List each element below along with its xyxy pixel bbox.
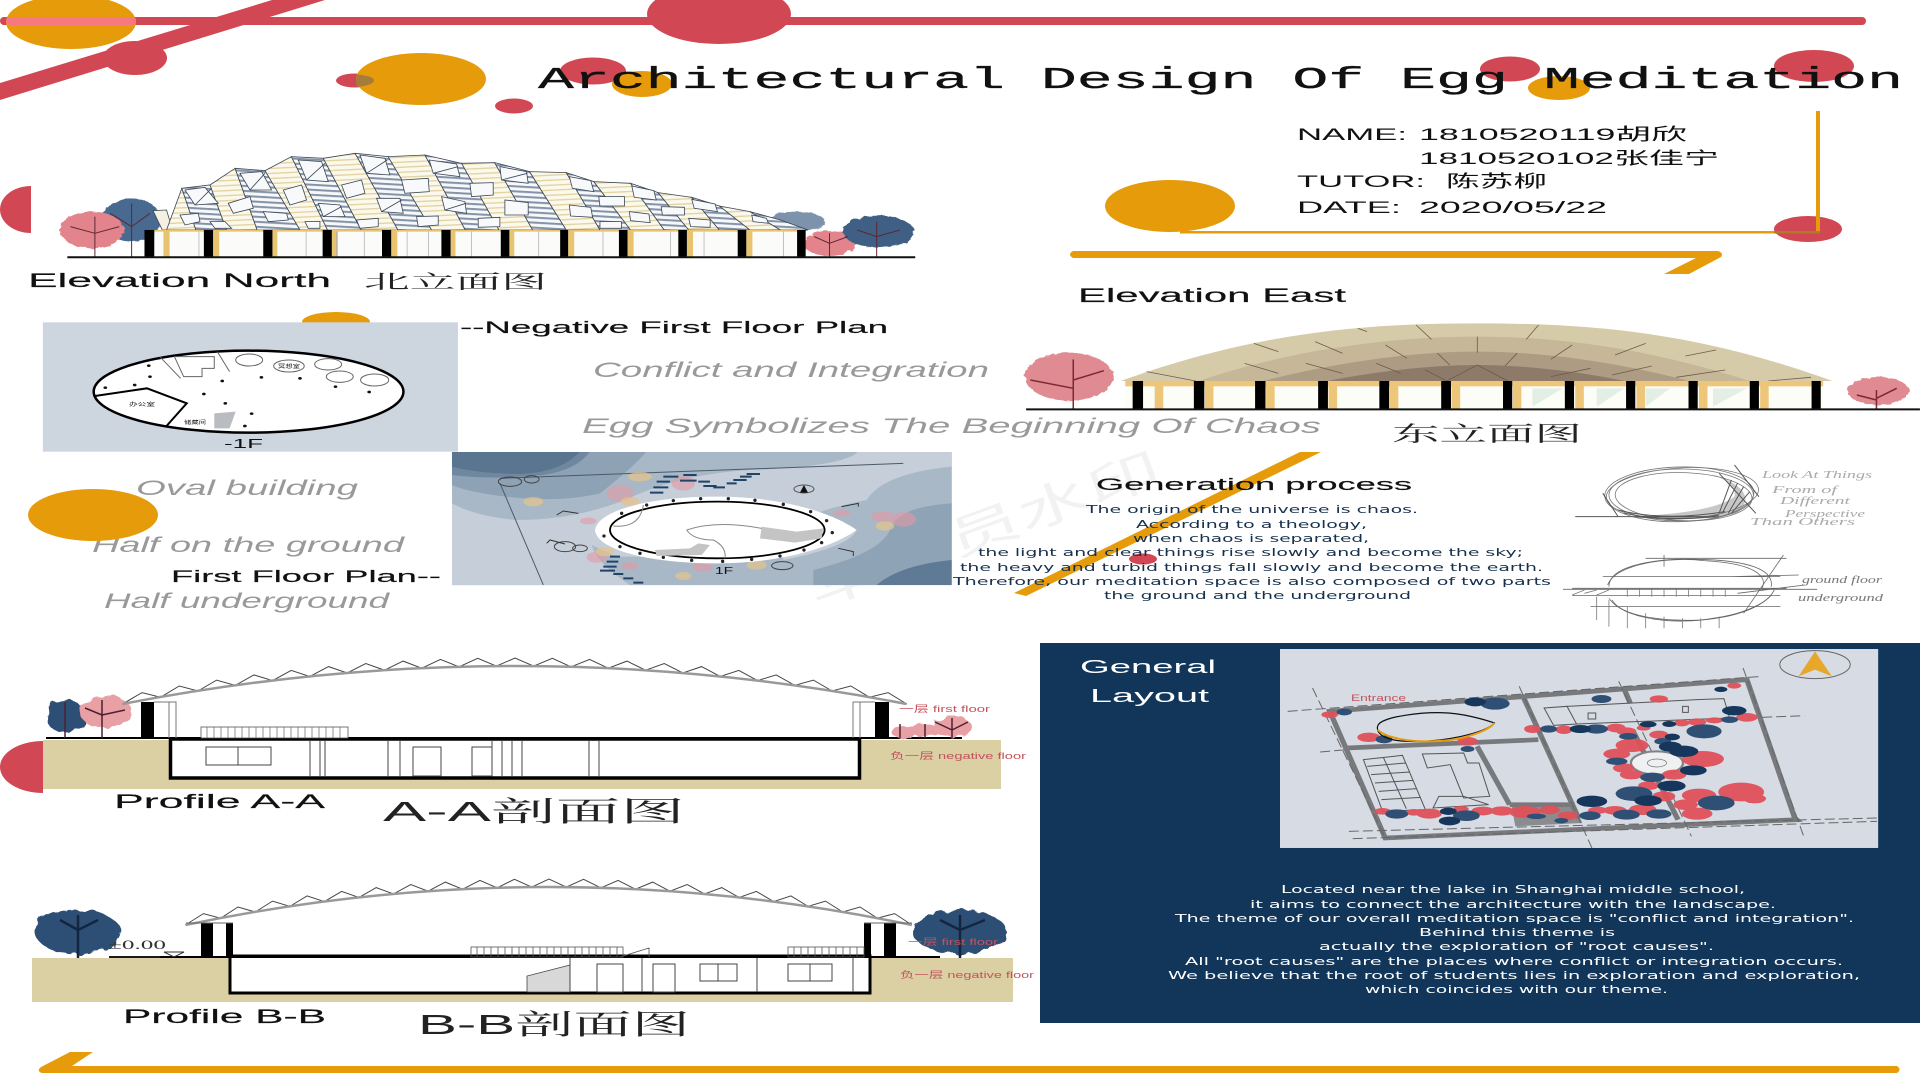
text block: generation: when chaos is separated, (1133, 532, 1369, 545)
roof B (185, 879, 912, 925)
level mark (109, 952, 184, 957)
text block: generation: the ground and the underground (1104, 589, 1411, 602)
section marks (547, 503, 858, 556)
top red bar (0, 17, 1866, 25)
label: profile A-A (114, 792, 685, 827)
info block: names, tutor, date: TUTOR: (1297, 172, 1425, 191)
red half circle left (0, 186, 31, 233)
plan labels: 冥想室 (278, 363, 300, 370)
pillars B (201, 923, 896, 957)
sketch: handwritten notes 1: Perspective (1783, 509, 1866, 520)
label: profile A-A: Profile A-A (114, 792, 326, 813)
plan labels: 储藏间 (184, 419, 206, 426)
roof A (123, 658, 907, 704)
red diagonal band (0, 0, 325, 100)
gold ellipse (1105, 180, 1235, 232)
section B-B labels: ±0.00 (108, 937, 166, 952)
trees B (35, 910, 1007, 954)
script text phrases: Oval building (136, 477, 359, 500)
label: profile B-B (123, 1007, 690, 1040)
panel: general layout (1040, 643, 1920, 1023)
trees (1321, 683, 1766, 820)
label: elevation east: Elevation East (1078, 286, 1348, 307)
info block: names, tutor, date: DATE: (1297, 198, 1401, 217)
label: elevation north: 北立面图 (364, 271, 547, 293)
north arrow (1780, 651, 1850, 679)
stairs B (527, 965, 570, 992)
script text phrases: Conflict and Integration (593, 359, 989, 382)
panel: general layout: Layout (1090, 686, 1209, 706)
decoration: gold frame and arrow around info (1070, 111, 1842, 274)
plan labels: 办公室 (129, 401, 155, 408)
label: east in chinese: 东立面图 (1392, 423, 1582, 446)
elevation north drawing (60, 153, 915, 257)
sketch: egg in ground section (1563, 555, 1817, 628)
ground floor band (154, 230, 803, 257)
red ellipse at frame corner (1774, 216, 1842, 242)
info block: names, tutor, date: 1810520119胡欣 (1419, 125, 1687, 144)
big red ellipse top (647, 0, 791, 44)
small header ellipses (336, 74, 374, 88)
text block: generation: the heavy and turbid things fall slowly and become the earth. (960, 561, 1543, 574)
elevation east drawing (1025, 323, 1920, 409)
rooms A (206, 740, 599, 776)
site map (1280, 649, 1878, 848)
section A-A floor labels (890, 704, 1026, 761)
text block: generation: The origin of the universe is chaos. (1084, 503, 1418, 516)
text block: site description: We believe that the root of students lies in exploration and exploration, (1168, 969, 1860, 982)
trees A (45, 696, 972, 738)
text block: generation (951, 503, 1551, 602)
script text phrases (92, 359, 1322, 613)
roof facets (153, 153, 808, 230)
script text phrases: Half underground (104, 590, 391, 613)
rooms B (570, 958, 853, 992)
script text phrases: Egg Symbolizes The Beginning Of Chaos (582, 415, 1322, 438)
gold arrow (1070, 251, 1722, 274)
sketch: handwritten notes 1 (1750, 470, 1872, 528)
section A-A drawing (0, 658, 1001, 793)
plants (580, 476, 916, 572)
sketch: handwritten notes 1: Look At Things (1760, 470, 1872, 481)
script text phrases: Half on the ground (92, 534, 406, 557)
first floor plan map (452, 452, 952, 585)
red dot near text (1129, 554, 1157, 564)
sketch: handwritten notes 1: Than Others (1750, 517, 1855, 528)
surrounding buildings (1363, 699, 1730, 811)
outer dashed lines (1288, 668, 1877, 848)
text block: generation: the light and clear things rise slowly and become the sky; (978, 546, 1523, 559)
ground floor band (1125, 381, 1823, 409)
text block: site description (1168, 883, 1860, 996)
sketch: handwritten notes 1: From of (1770, 485, 1839, 496)
info block: names, tutor, date: 2020/05/22 (1419, 198, 1607, 217)
1F label: 1F (715, 566, 733, 577)
info block: names, tutor, date (1297, 125, 1719, 217)
compass (794, 485, 814, 493)
gold half ellipse behind plan (302, 312, 370, 332)
info block: names, tutor, date: 1810520102张佳宁 (1419, 149, 1719, 168)
text block: site description: actually the exploration of "root causes". (1319, 940, 1714, 953)
railings B (471, 947, 864, 957)
room circles (236, 354, 389, 386)
dome rings (1120, 323, 1832, 381)
office walls (95, 388, 187, 426)
stepping stones (600, 474, 760, 583)
label: profile B-B: B-B剖面图 (418, 1009, 690, 1040)
section B-B labels (108, 937, 1034, 980)
egg plan white ring (595, 497, 857, 563)
section B-B labels: 负一层 negative floor (900, 969, 1034, 980)
section B-B drawing (32, 879, 1013, 1002)
trees behind (60, 198, 914, 256)
sketch: egg concept (1575, 462, 1765, 524)
gold ellipse top left (6, 0, 136, 49)
sketch: handwritten notes 2: ground floor (1802, 575, 1882, 586)
earth (32, 958, 1013, 1002)
plan labels (129, 318, 888, 586)
roads (1330, 680, 1797, 838)
plan labels: First Floor Plan-- (171, 567, 441, 586)
central plaza (1631, 751, 1683, 775)
red half circle (0, 741, 43, 793)
sketch: handwritten notes 1: Different (1778, 496, 1850, 507)
title: Architectural Design Of Egg Meditation (538, 63, 1903, 98)
railing A (201, 727, 348, 738)
section B-B labels: 一层 first floor (908, 937, 998, 947)
column dots ring (602, 497, 834, 563)
column dots (103, 364, 371, 427)
earth (43, 740, 1001, 789)
gold diagonal line (1014, 452, 1321, 596)
sketch: handwritten notes 2: underground (1798, 593, 1885, 604)
interior (170, 739, 860, 778)
label: elevation north: Elevation North (28, 271, 331, 292)
info block: names, tutor, date: 陈苏柳 (1446, 172, 1547, 191)
text block: site description: All "root causes" are the places where conflict or integration occurs. (1185, 955, 1843, 968)
plan labels: -1F (224, 436, 263, 451)
heading: generation process: Generation process (1096, 475, 1412, 494)
label: profile A-A: A-A剖面图 (383, 796, 685, 827)
oval outline (94, 351, 403, 433)
pink trees (1025, 353, 1909, 405)
text block: generation: Therefore, our meditation space is also composed of two parts (951, 575, 1551, 588)
watermark: 华会员水印 (802, 442, 1167, 618)
text block: site description: The theme of our overall meditation space is "conflict and integration". (1173, 912, 1854, 925)
decoration: top header shapes (0, 0, 1866, 114)
site lines (500, 463, 903, 585)
label: profile B-B: Profile B-B (123, 1007, 326, 1028)
text block: site description: Behind this theme is (1419, 926, 1615, 939)
plan labels: --Negative First Floor Plan (460, 318, 888, 337)
label: elevation north (28, 271, 547, 293)
text block: site description: which coincides with our theme. (1365, 983, 1668, 996)
gold ellipse left middle (28, 489, 158, 541)
section A-A floor labels: 一层 first floor (899, 704, 990, 714)
interior stairs and paths (760, 527, 823, 543)
pillars A (141, 702, 889, 738)
sketch: handwritten notes 2 (1798, 575, 1885, 604)
label: entrance: Entrance (1351, 693, 1406, 703)
section A-A floor labels: 负一层 negative floor (890, 750, 1026, 761)
text block: site description: Located near the lake in Shanghai middle school, (1281, 883, 1745, 896)
negative first floor plan panel (43, 322, 458, 452)
interior (230, 956, 870, 993)
gravel plot (1512, 805, 1582, 826)
bottom gold arrow (39, 1052, 1899, 1073)
site circles (498, 476, 793, 570)
text block: site description: it aims to connect the architecture with the landscape. (1250, 898, 1776, 911)
contour layers (452, 452, 858, 520)
info block: names, tutor, date: NAME: (1297, 125, 1407, 144)
heading: general layout: General (1080, 657, 1216, 677)
text block: generation: According to a theology, (1136, 518, 1367, 531)
egg building (1377, 651, 1850, 742)
roof windows (180, 155, 528, 228)
